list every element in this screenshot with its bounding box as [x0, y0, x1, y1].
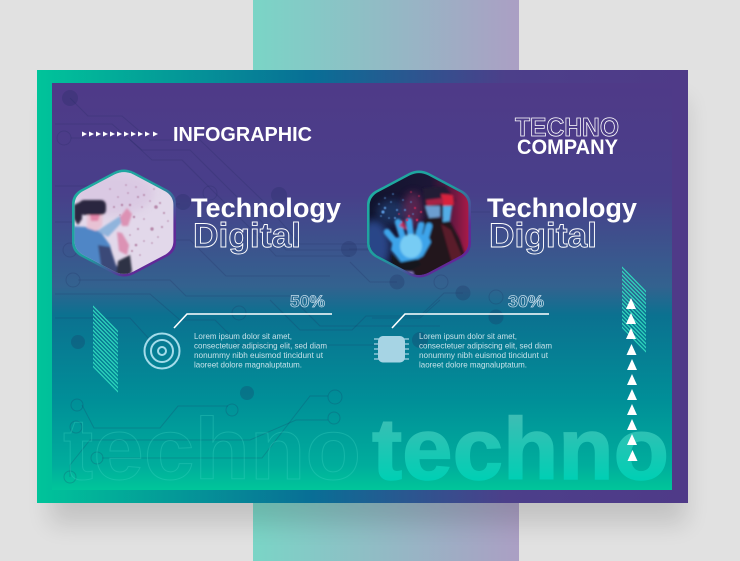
- icon: microchip: [374, 336, 409, 362]
- text block: 50%: [194, 332, 327, 370]
- title block left: Digital: [193, 217, 301, 255]
- text block: 30%: nonummy nibh euismod tincidunt ut: [419, 351, 549, 360]
- text block: 50%: consectetuer adipiscing elit, sed diam: [194, 342, 327, 350]
- text block: 30%: consectetuer adipiscing elit, sed diam: [419, 342, 552, 350]
- percentage: 50%: 50%: [290, 293, 325, 311]
- circuit background nodes: [62, 90, 504, 400]
- heading: infographic: INFOGRAPHIC: [173, 124, 312, 146]
- title block left: [191, 193, 341, 255]
- hatched shape right: [622, 266, 646, 352]
- leader line: 30%: [392, 314, 549, 328]
- logo: techno company: TECHNO: [515, 112, 619, 142]
- inner panel: [52, 83, 672, 490]
- arrow row: [82, 132, 158, 136]
- percentage: 30%: 30%: [508, 293, 544, 311]
- icon: target: [144, 334, 180, 368]
- text block: 30%: laoreet dolore magnaluptatum.: [419, 360, 527, 370]
- logo: techno company: [515, 112, 619, 159]
- photo: person with VR headset: [72, 170, 176, 276]
- leader line: 50%: [174, 314, 332, 328]
- hatched shape left: [93, 306, 118, 392]
- text block: 30%: Lorem ipsum dolor sit amet,: [419, 332, 517, 341]
- watermark: outlined techno: techno: [63, 401, 361, 498]
- circuit background pattern: [55, 98, 503, 483]
- title block left: Technology: [191, 193, 341, 223]
- text block: 50%: nonummy nibh euismod tincidunt ut: [194, 351, 324, 360]
- text block: 50%: Lorem ipsum dolor sit amet,: [194, 332, 292, 341]
- background gradient strip: [253, 0, 519, 561]
- logo: techno company: COMPANY: [517, 136, 618, 159]
- card border: [37, 70, 688, 503]
- watermark: solid techno: techno: [372, 401, 669, 498]
- title block right: Digital: [489, 217, 597, 255]
- photo: person with raised hand: [367, 170, 471, 278]
- text block: 30%: [419, 332, 552, 370]
- triangle column: [626, 298, 638, 461]
- card shadow: [50, 100, 686, 524]
- title block right: Technology: [487, 193, 637, 223]
- text block: 50%: laoreet dolore magnaluptatum.: [194, 360, 302, 370]
- title block right: [487, 193, 637, 255]
